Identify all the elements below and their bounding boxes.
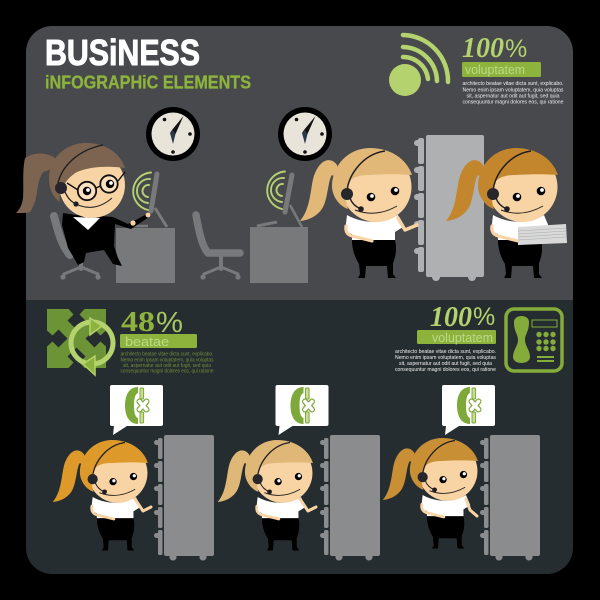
speech bubble 2 [276,385,328,435]
stat block: 48%: beatae [125,334,169,349]
speech bubble 3 [442,385,495,435]
stat block: bottom 100%: 100 [430,301,472,333]
workstation: empty chair [196,215,241,280]
workstation: occupied chair [54,216,101,280]
icon: paper stack [518,224,567,245]
icon: big wifi signal [389,35,448,96]
stat block: 48%: consequuntur magni dolores eos, qui ratione [120,368,214,374]
cabinet: top [414,135,484,281]
stat block: bottom 100%: % [473,303,495,331]
cabinet: bottom middle [320,435,380,561]
character: bottom left operator [53,440,151,550]
stat block: bottom 100%: sit, aspernatur aut odit aut fugit, sed quia [399,361,492,367]
character: bottom middle operator [218,440,316,550]
stat block: 48%: architecto beatae vitae dicta sunt, explicabo. [120,352,214,358]
subtitle: iNFOGRAPHiC ELEMENTS [45,72,251,92]
stat block: 48%: % [156,307,183,339]
stat block: bottom 100%: architecto beatae vitae dicta sunt, explicabo. [395,349,496,355]
stat block: top 100%: consequuntur magni dolores eos, qui ratione [462,100,564,106]
speech bubble 1 [110,385,163,435]
stat block: top 100%: Nemo enim ipsam voluptatem, quia voluptas [462,88,564,94]
stat block: bottom 100%: consequuntur magni dolores eos, qui ratione [395,367,496,373]
workstation: left desk and monitor [116,172,175,283]
stat block: top 100%: sit, aspernatur aut odit aut fugit, sed quia [466,94,560,100]
icon: telephone [506,309,562,371]
stat block: top 100%: 100 [462,32,504,64]
character: operator holding papers [446,148,567,278]
stat block: top 100%: voluptatem [465,63,525,77]
workstation: right desk and monitor [250,172,308,283]
title: BUSiNESS [45,32,200,73]
character: bottom right operator [383,438,478,548]
stat block: bottom 100% [395,301,496,373]
cabinet: bottom left [154,435,214,561]
icon: recycle arrows [47,309,113,375]
stat block: top 100%: % [505,35,527,63]
icon: wall clock right [278,107,332,161]
stat block: 48%: 48 [121,306,155,338]
character: woman with glasses [16,143,150,266]
stat block: top 100% [462,32,564,106]
stat block: bottom 100%: Nemo enim ipsam voluptatem, quia voluptas [395,355,496,361]
icon: wall clock left [146,107,200,161]
stat block: bottom 100%: voluptatem [432,331,493,345]
stat block: 48%: sit, aspernatur aut odit aut fugit, sed quia [123,363,211,369]
character: blonde operator [300,148,417,278]
stat block: 48%: Nemo enim ipsam voluptatem, quia voluptas [120,358,214,364]
stat block: top 100%: architecto beatae vitae dicta sunt, explicabo. [462,81,564,87]
cabinet: bottom right [480,435,540,561]
stat block: 48% [120,306,214,374]
